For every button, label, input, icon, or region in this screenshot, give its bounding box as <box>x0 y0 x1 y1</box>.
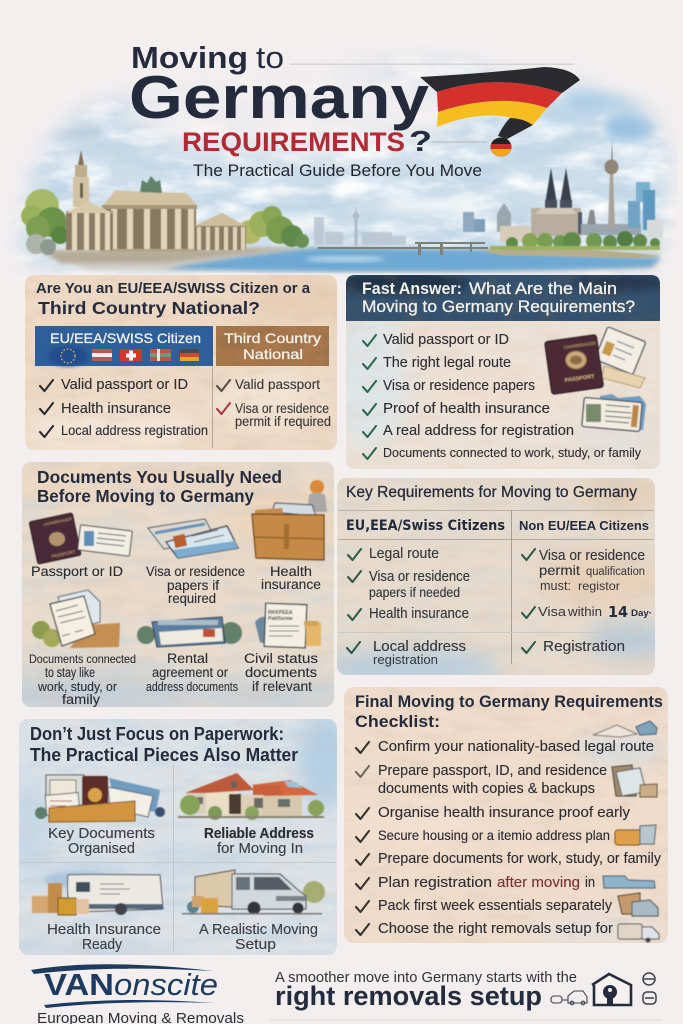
table header: Non EU/EEA Citizens <box>519 518 649 533</box>
checklist: A real address for registration <box>383 423 574 439</box>
label: Documents connected <box>29 652 136 666</box>
column: non EU citizens: Visa <box>538 604 567 619</box>
icon: passport and card <box>29 513 132 564</box>
panel: citizen or third country national <box>25 275 337 450</box>
footer tagline <box>270 957 666 1020</box>
icon: leather wallet with figure <box>252 480 327 560</box>
icon: document stack <box>612 765 657 797</box>
label: address documents <box>146 680 238 694</box>
column: EU citizens: Local address <box>373 639 466 655</box>
title: Requirements: REQUIREMENTS <box>182 127 405 157</box>
column: non EU citizens: qualification <box>586 566 645 578</box>
label <box>146 564 245 606</box>
subtitle: The Practical Guide Before You Move <box>193 162 482 180</box>
panel: fast answer <box>330 273 670 469</box>
label <box>244 651 318 694</box>
item: rental agreement <box>137 617 242 694</box>
heading: Are You an EU/EEA/SWISS Citizen or a <box>36 281 311 297</box>
heading: Key Requirements for Moving to Germany <box>346 484 637 501</box>
EU checklist: Local address registration <box>61 423 208 438</box>
header band: What Are the Main <box>469 279 617 298</box>
heading: The Practical Pieces Also Matter <box>30 745 298 765</box>
checklist items: Prepare passport, ID, and residence <box>378 763 607 779</box>
label: Key Documents <box>48 826 155 842</box>
checklist <box>363 332 641 460</box>
heading: Before Moving to Germany <box>37 486 254 506</box>
hero illustration: watercolor sky and German skyline <box>5 40 678 275</box>
icon: small badges <box>643 973 656 1004</box>
footer logo <box>31 964 244 1024</box>
checklist: Visa or residence papers <box>383 378 535 394</box>
label: documents <box>245 665 317 680</box>
heading: Don’t Just Focus on Paperwork: <box>30 724 284 744</box>
column: non EU citizens: Visa or residence <box>539 548 645 564</box>
column: non EU citizens: registor <box>578 579 620 593</box>
checklist items: Confirm your nationality-based legal route <box>378 739 654 755</box>
checklist items: documents with copies & backups <box>378 781 595 797</box>
right skyline with cathedral and TV tower <box>463 139 663 250</box>
column: non EU citizens: within <box>567 604 602 619</box>
label: Civil status <box>244 651 318 666</box>
item: realistic moving setup <box>182 870 325 953</box>
icon: passport and ID: CHAMBRAGER <box>563 340 597 350</box>
icon: map and box <box>593 721 657 737</box>
EU checklist: Valid passport or ID <box>61 377 188 393</box>
icon: civil documents: Paktfurma <box>268 616 293 622</box>
flags row <box>61 349 199 363</box>
footer tagline: right removals setup <box>275 981 542 1011</box>
panel: practical pieces <box>19 719 337 955</box>
distant city <box>314 207 406 246</box>
column: non EU citizens: permit <box>539 563 580 578</box>
label <box>261 564 321 592</box>
label <box>204 826 314 857</box>
bridge <box>318 242 488 255</box>
item: reliable address <box>178 773 324 857</box>
panel: final checklist <box>344 687 670 944</box>
column: non EU citizens: 14 <box>608 603 628 621</box>
label <box>29 652 136 707</box>
item: visa or residence papers <box>146 519 245 606</box>
column: EU citizens: papers if needed <box>369 585 460 600</box>
column header: EU/EEA/Swiss citizen: EU/EEA/SWISS Citizen <box>50 330 201 346</box>
panel: documents you usually need <box>22 462 334 707</box>
column header: third country national: Third Country <box>224 330 321 346</box>
label: if relevant <box>252 679 312 694</box>
watercolor sky <box>5 40 678 275</box>
checklist items: Choose the right removals setup for <box>378 921 613 937</box>
footer tagline: A smoother move into Germany starts with the <box>275 970 577 986</box>
column: non EU citizens: Registration <box>543 639 625 655</box>
label: required <box>168 591 216 606</box>
icon: rental agreement folder <box>137 617 242 647</box>
heading: Documents You Usually Need <box>37 467 282 487</box>
Brandenburg gate style building <box>65 150 246 252</box>
column: non EU citizens <box>522 548 652 655</box>
checklist: Valid passport or ID <box>383 332 509 348</box>
icon: visa papers <box>148 519 238 558</box>
column header: third country national <box>216 326 329 366</box>
icon: civil documents: RKKPEEA <box>268 610 293 616</box>
title block <box>129 40 580 180</box>
label <box>199 922 318 953</box>
header band <box>346 275 660 321</box>
item: health insurance <box>252 480 327 592</box>
heading: Checklist: <box>355 712 440 731</box>
label: agreement or <box>152 665 228 680</box>
icon: passport and card: PASSPORT <box>51 549 76 559</box>
label: Passport or ID <box>31 564 123 579</box>
icon: house outline <box>592 974 631 1005</box>
icon: passport and ID: PASSPORT <box>564 374 595 384</box>
checklist items: in <box>585 875 595 891</box>
column: EU citizens: Legal route <box>369 546 439 562</box>
checklist items: Prepare documents for work, study, or family <box>378 851 662 867</box>
checklist: Documents connected to work, study, or family <box>383 445 641 460</box>
icon: German flag question mark <box>420 67 580 159</box>
column: EU citizens: Visa or residence <box>369 569 470 585</box>
title block: to <box>256 40 284 75</box>
checklist items: Organise health insurance proof early <box>378 805 631 821</box>
icon: folder case <box>615 825 656 845</box>
heading <box>355 693 663 731</box>
heading: Third Country National? <box>38 298 260 318</box>
icon: moving truck <box>182 870 325 914</box>
label: papers if <box>167 578 219 593</box>
checklist items: Secure housing or a itemio address plan <box>378 828 610 843</box>
icon: papers with box and shrub <box>32 590 120 648</box>
third country checklist <box>217 377 331 429</box>
footer logo: VAN <box>44 967 114 1002</box>
label: Ready <box>82 937 123 953</box>
label: for Moving In <box>217 841 303 857</box>
header band: Moving to Germany Requirements? <box>362 297 635 316</box>
icon: boxes and small van <box>618 893 658 916</box>
third country checklist: Valid passport <box>235 377 320 392</box>
icon: passport and ID <box>545 327 646 431</box>
label: A Realistic Moving <box>199 922 318 938</box>
checklist items <box>356 739 662 937</box>
icon: stacked papers <box>603 876 655 888</box>
third country checklist: Visa or residence <box>235 401 329 416</box>
heading <box>37 467 282 506</box>
EU checklist: Health insurance <box>61 401 171 417</box>
header band: Fast Answer: <box>362 279 462 298</box>
label: Health <box>270 564 312 579</box>
label: work, study, or <box>37 680 117 694</box>
third country checklist: permit if required <box>235 414 331 429</box>
label: Setup <box>235 937 276 953</box>
trees behind left side <box>21 189 309 255</box>
title: Moving to: Moving <box>131 40 248 75</box>
checklist items: after moving <box>497 875 580 891</box>
label: Organised <box>68 841 135 857</box>
column header: third country national: National <box>243 346 303 362</box>
label <box>48 826 155 857</box>
icon: document case <box>35 775 165 822</box>
column: non EU citizens: Day· <box>631 608 652 619</box>
label <box>146 651 238 694</box>
label: Health Insurance <box>47 922 161 938</box>
column: EU citizens: registration <box>373 653 438 667</box>
icon: civil documents <box>255 603 321 648</box>
checklist items: Plan registration <box>378 875 492 891</box>
table header: EU,EEA/Swiss Citizens <box>346 518 505 534</box>
label <box>47 922 161 953</box>
label: to stay like <box>45 665 95 680</box>
column header: EU/EEA/Swiss citizen <box>35 326 213 366</box>
EU checklist <box>40 377 208 438</box>
title: Germany: Germany <box>129 64 430 131</box>
heading: Final Moving to Germany Requirements <box>355 693 663 711</box>
checklist: Proof of health insurance <box>383 401 550 417</box>
heading <box>30 724 298 765</box>
icon: passport and card: CHAMBRAGER <box>43 516 72 527</box>
checklist items: Pack first week essentials separately <box>378 898 613 914</box>
footer logo: onscite <box>114 967 218 1002</box>
item: civil status documents <box>244 603 321 694</box>
heading <box>36 281 311 318</box>
item: key documents organised <box>35 775 165 857</box>
river and embankment <box>30 247 662 272</box>
column: EU citizens: Health insurance <box>369 606 469 622</box>
icon: house <box>178 773 324 820</box>
pale glow behind title <box>120 55 470 155</box>
icon: car with trailer <box>551 991 587 1005</box>
panel: key requirements table <box>337 478 655 675</box>
icon: van <box>618 924 659 942</box>
label: insurance <box>261 577 321 592</box>
item: health insurance ready <box>32 872 163 953</box>
title block: ? <box>409 126 432 158</box>
label: Reliable Address <box>204 826 314 842</box>
checklist icons <box>593 721 659 942</box>
label: family <box>62 692 100 707</box>
label: Visa or residence <box>146 564 245 579</box>
table header <box>338 510 654 664</box>
icon: van with boxes <box>32 872 163 915</box>
column: EU citizens <box>347 546 470 667</box>
checklist: The right legal route <box>383 355 511 371</box>
column: non EU citizens: must: <box>540 579 571 593</box>
item: passport or ID <box>29 513 132 579</box>
item: documents connected to stay <box>29 590 136 707</box>
label: Rental <box>167 651 208 666</box>
